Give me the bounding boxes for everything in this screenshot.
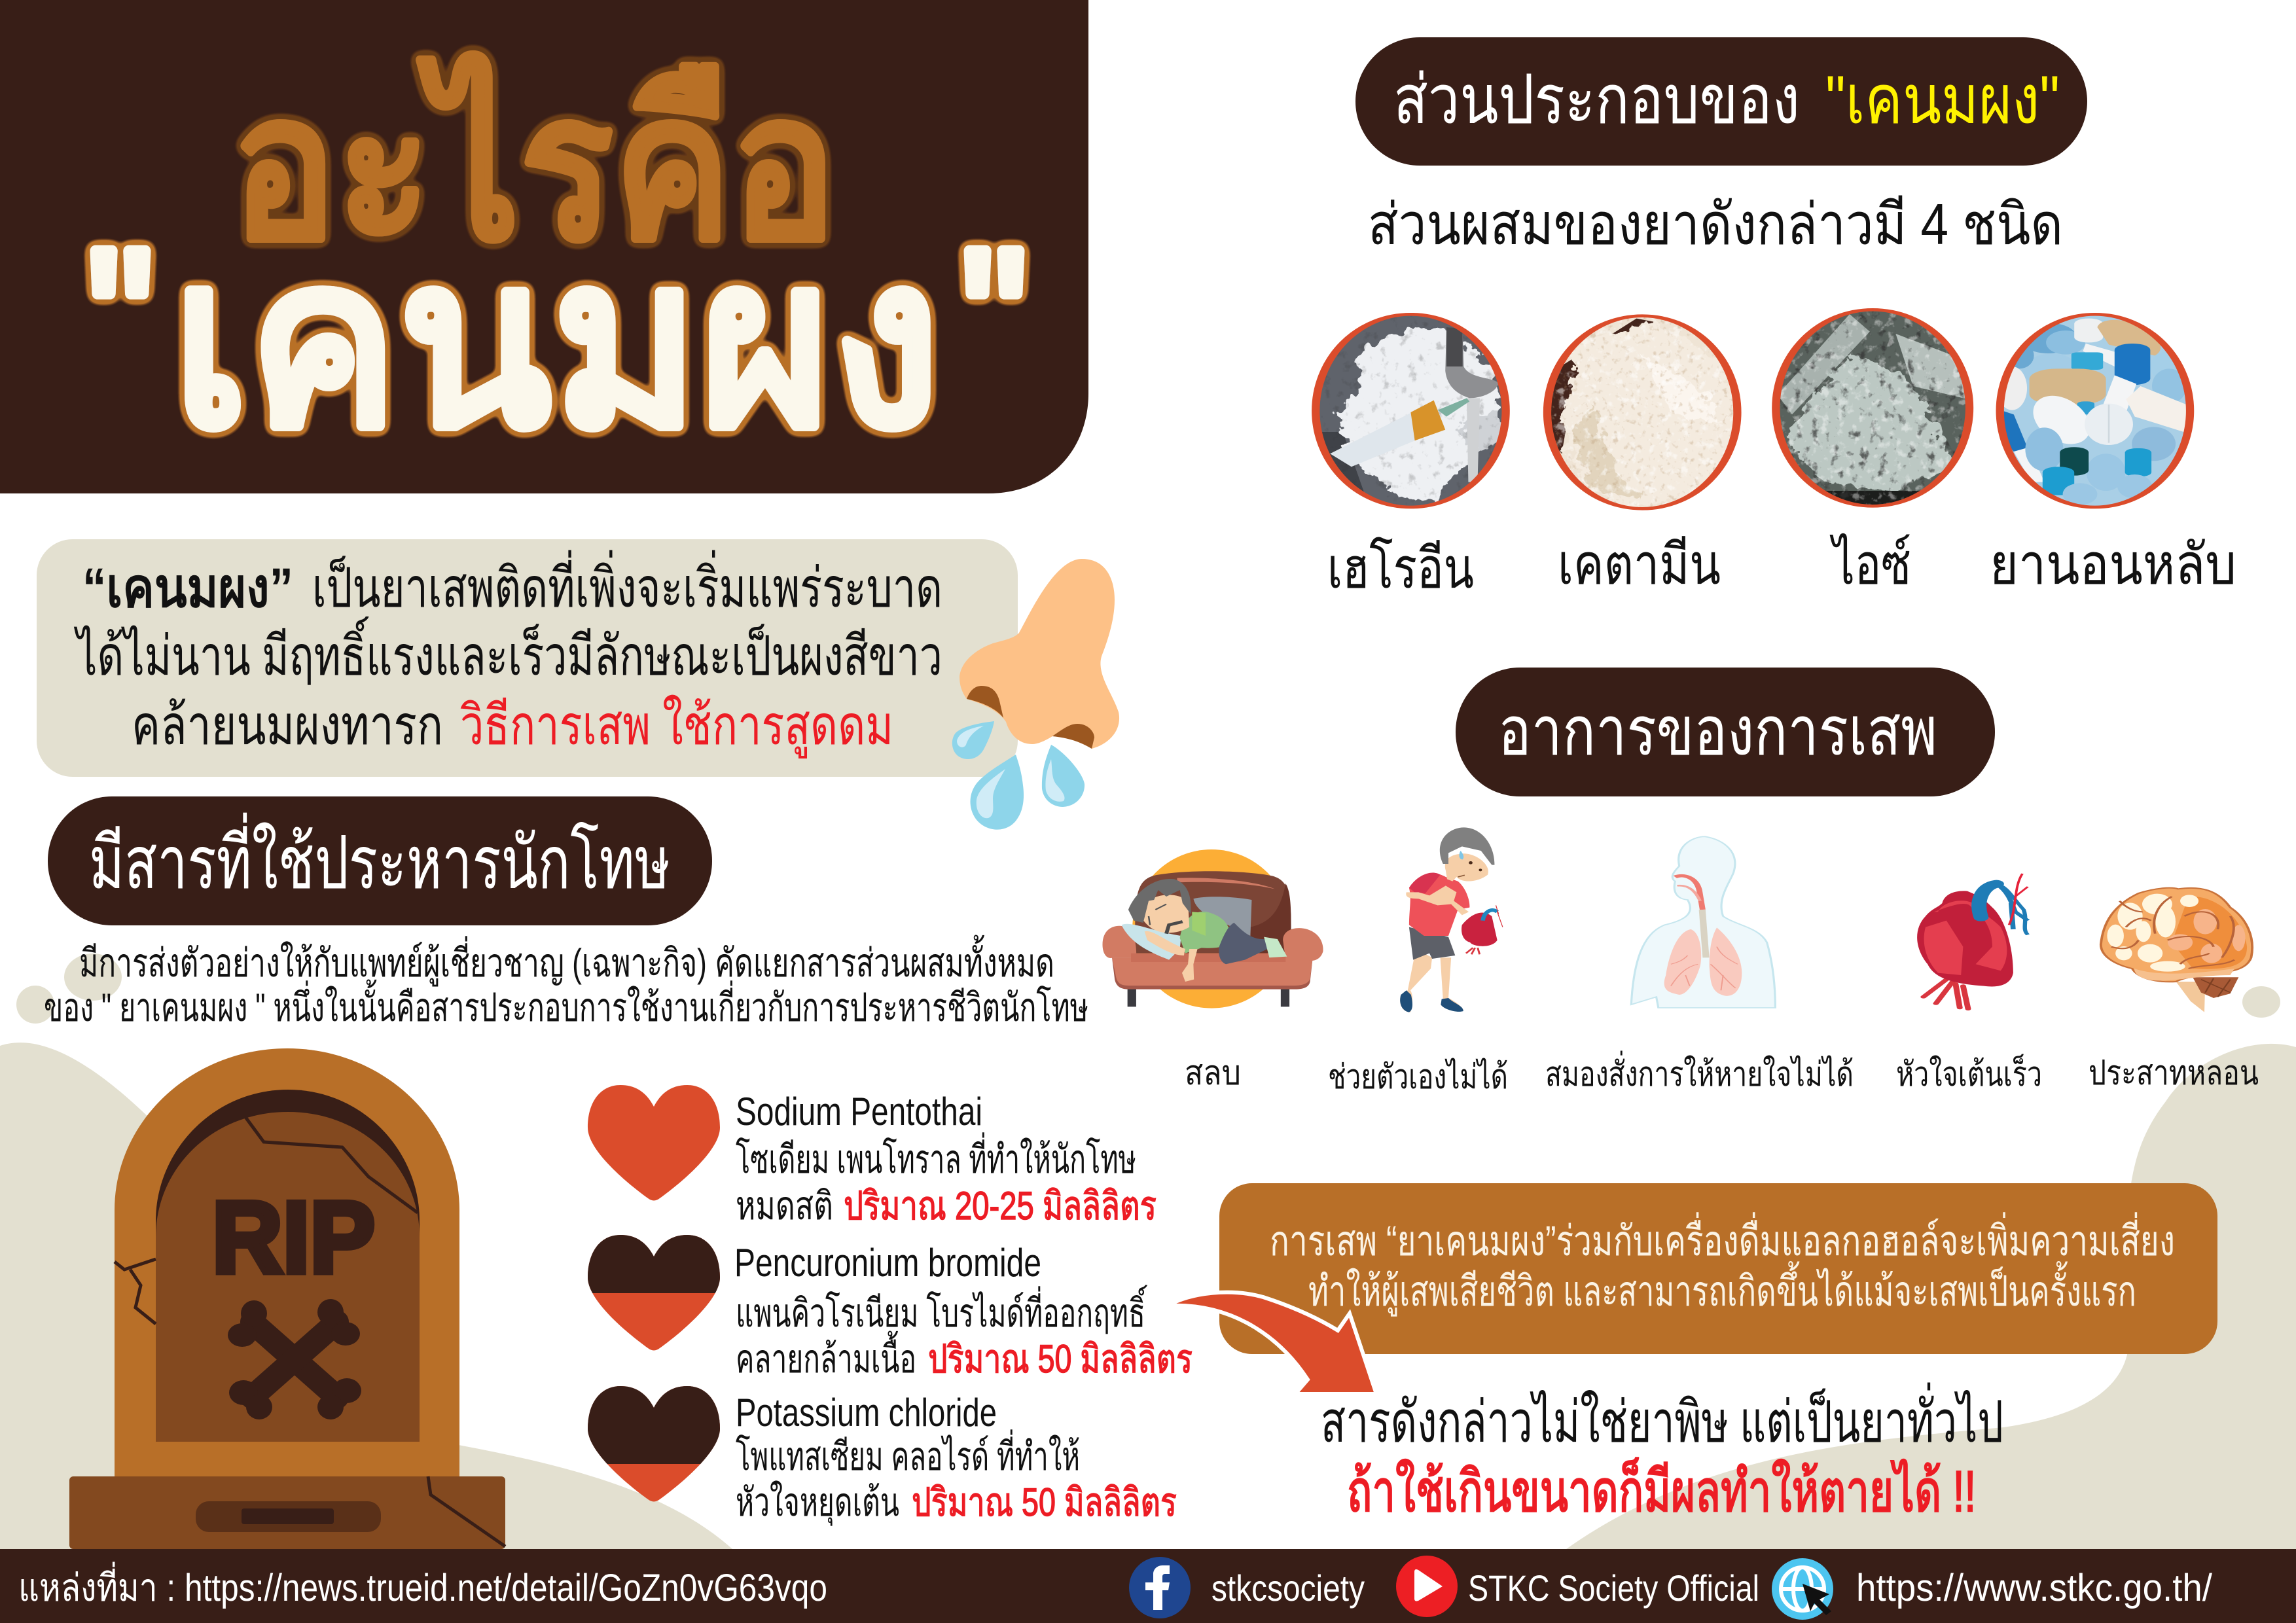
- footer: [0, 1549, 2296, 1623]
- substance 3 text: หัวใจหยุดเต้น: [736, 1480, 899, 1526]
- icon: person clutching chest: [1400, 827, 1503, 1012]
- heading: execution substances: [48, 796, 712, 925]
- warning text: ถ้าใช้เกินขนาดก็มีผลทำให้ตายได้ !!: [1347, 1457, 1976, 1524]
- substance 3 text: Potassium chloride: [736, 1391, 997, 1435]
- callout: alcohol warning: [1219, 1183, 2217, 1354]
- drug labels: [1327, 533, 2236, 600]
- youtube name: STKC Society Official: [1468, 1567, 1759, 1609]
- substance 2 text: Pencuronium bromide: [734, 1241, 1041, 1285]
- description text: เป็นยาเสพติดที่เพิ่งจะเริ่มแพร่ระบาด: [312, 550, 942, 618]
- photo: ketamine: [1541, 314, 1743, 510]
- facebook handle: stkcsociety: [1211, 1567, 1365, 1609]
- drug labels: เฮโรอีน: [1327, 537, 1474, 600]
- tomb RIP text: RIP: [212, 1181, 375, 1294]
- heading: execution substances: มีสารที่ใช้ประหารนักโทษ: [89, 812, 670, 904]
- symptom labels: หัวใจเต้นเร็ว: [1896, 1054, 2042, 1094]
- warning text: [1321, 1382, 2003, 1524]
- paragraph: execution note: [44, 935, 1088, 1029]
- substance 2 text: [734, 1241, 1193, 1381]
- subheading: four types: ส่วนผสมของยาดังกล่าวมี 4 ชนิด: [1368, 192, 2063, 257]
- symptom labels: ประสาทหลอน: [2089, 1054, 2259, 1092]
- photo: heroin: [1302, 312, 1510, 508]
- photo: ice: [1772, 308, 1973, 508]
- description text: “เคนมผง”: [82, 557, 293, 618]
- title right quote: ": [961, 208, 1027, 428]
- symptom labels: [1185, 1050, 2259, 1096]
- heading: composition: [1355, 37, 2087, 166]
- substance 1 text: [736, 1090, 1157, 1228]
- heading: symptoms: อาการของการเสพ: [1498, 694, 1937, 770]
- icon: globe: [1772, 1558, 1833, 1620]
- icon: brain: [2101, 888, 2252, 1012]
- heading: symptoms: [1456, 668, 1995, 796]
- source text: แหล่งที่มา : https://news.trueid.net/detail/GoZn0vG63vqo: [18, 1561, 827, 1609]
- icon: heart low: [588, 1386, 720, 1501]
- symptom labels: ช่วยตัวเองไม่ได้: [1328, 1058, 1508, 1096]
- symptom labels: สลบ: [1185, 1054, 1241, 1092]
- title line 1: อะไรคือ: [232, 53, 836, 282]
- substance 3 text: โพแทสเซียม คลอไรด์ ที่ทำให้: [736, 1429, 1080, 1478]
- icon: youtube: [1396, 1556, 1458, 1617]
- paragraph: execution note: มีการส่งตัวอย่างให้กับแพทย์ผู้เชี่ยวชาญ (เฉพาะกิจ) คัดแยกสารส่วนผสมทั้งหมด: [79, 935, 1054, 987]
- title panel: [0, 0, 1088, 493]
- substance 1 text: โซเดียม เพนโทราล ที่ทำให้นักโทษ: [736, 1132, 1136, 1181]
- substance 2 text: แพนคิวโรเนียม โบรไมด์ที่ออกฤทธิ์: [736, 1285, 1147, 1335]
- substance 2: [588, 1235, 1193, 1381]
- icon: passed out on sofa: [1103, 849, 1323, 1008]
- drug labels: ยานอนหลับ: [1990, 533, 2236, 596]
- substance 2 text: คลายกล้ามเนื้อ: [736, 1330, 916, 1381]
- icon: heart organ: [1917, 874, 2028, 1009]
- drug labels: เคตามีน: [1558, 533, 1721, 596]
- substance 1: [588, 1085, 1157, 1228]
- icon: tombstone: [69, 1048, 505, 1549]
- substance 2 text: ปริมาณ 50 มิลลิลิตร: [928, 1337, 1193, 1381]
- description text: [74, 550, 942, 758]
- panel: what is it: [37, 539, 1018, 777]
- substance 1 text: Sodium Pentothai: [736, 1090, 982, 1133]
- website url: https://www.stkc.go.th/: [1856, 1567, 2213, 1609]
- paragraph: execution note: ของ " ยาเคนมผง " หนึ่งในนั้นคือสารประกอบการใช้งานเกี่ยวกับการประหารชีวิตนักโทษ: [44, 979, 1088, 1029]
- arrow: [1168, 1293, 1376, 1394]
- icon: facebook: [1129, 1557, 1191, 1618]
- icon: respiratory system: [1631, 836, 1775, 1008]
- symptom labels: สมองสั่งการให้หายใจไม่ได้: [1545, 1050, 1854, 1094]
- substance 1 text: ปริมาณ 20-25 มิลลิลิตร: [844, 1184, 1157, 1228]
- icon: heart half: [588, 1235, 720, 1351]
- heading: composition: "เคนมผง": [1825, 62, 2060, 138]
- drug labels: ไอซ์: [1829, 533, 1911, 596]
- icon: crossbones: [228, 1299, 361, 1419]
- heading: composition: ส่วนประกอบของ: [1393, 62, 1800, 138]
- description text: ได้ไม่นาน มีฤทธิ์แรงและเร็วมีลักษณะเป็นผงสีขาว: [74, 616, 942, 687]
- substance 3 text: ปริมาณ 50 มิลลิลิตร: [912, 1480, 1177, 1524]
- substance 1 text: หมดสติ: [736, 1184, 833, 1228]
- description text: วิธีการเสพ ใช้การสูดดม: [460, 694, 893, 758]
- description text: คล้ายนมผงทารก: [132, 694, 443, 756]
- substance 3: [588, 1386, 1177, 1526]
- warning text: สารดังกล่าวไม่ใช่ยาพิษ แต่เป็นยาทั่วไป: [1321, 1382, 2003, 1454]
- title left quote: ": [88, 208, 153, 428]
- background cream blobs: [0, 954, 2296, 1549]
- substance 3 text: [736, 1391, 1177, 1526]
- icon: nose with drops: [952, 559, 1119, 830]
- title line 2: เคนมผง: [171, 210, 941, 476]
- icon: heart full: [588, 1085, 720, 1200]
- photo: sleeping pills: [1996, 314, 2195, 508]
